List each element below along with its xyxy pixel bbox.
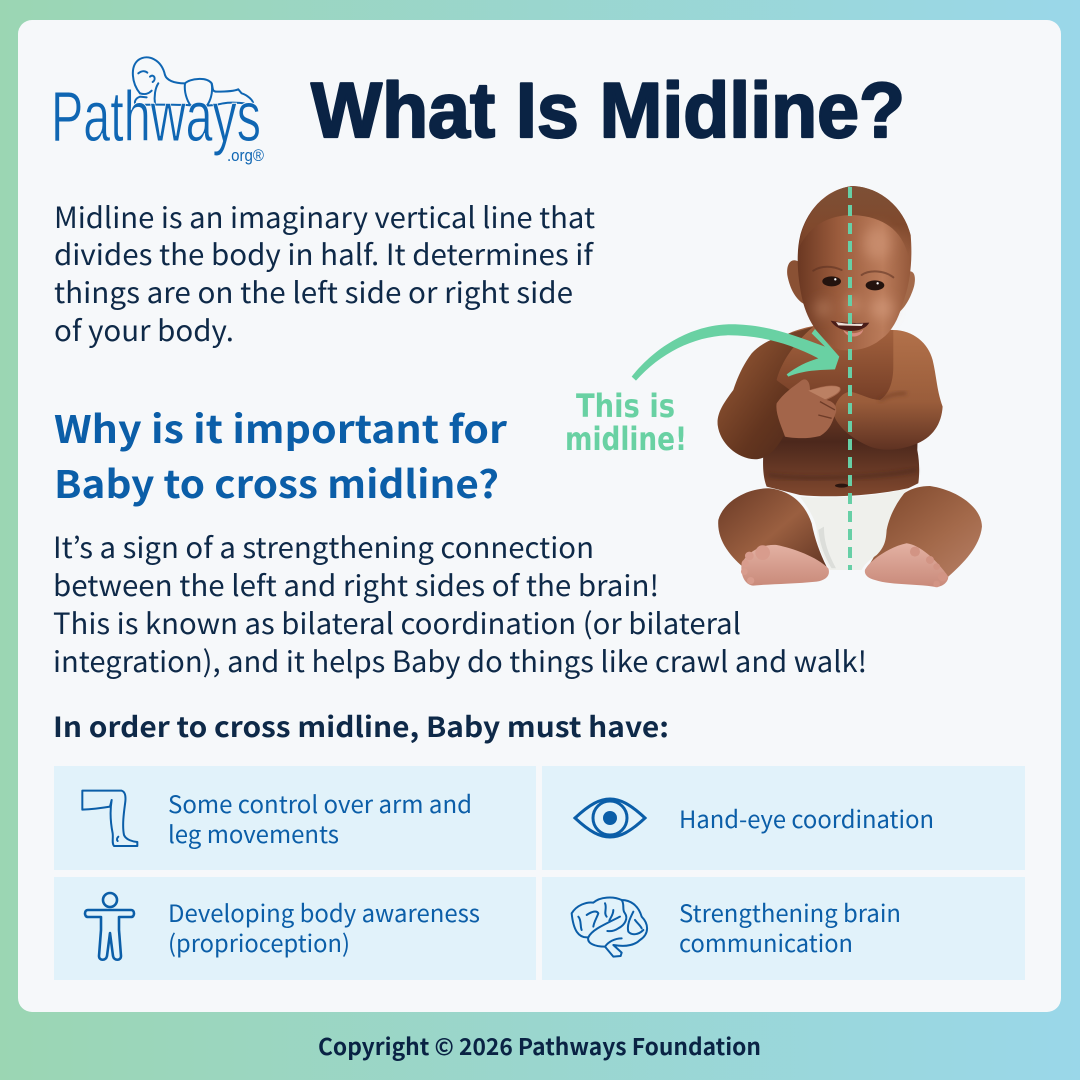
baby right leg	[865, 486, 982, 577]
baby diaper shading	[818, 527, 836, 568]
baby ears	[787, 260, 915, 314]
text: control: leg movements	[168, 815, 339, 850]
explanation text block: integration), and it helps Baby do things like crawl and walk!	[53, 639, 867, 681]
intro text block: things are on the left side or right side	[54, 270, 573, 312]
intro text block: Midline is an imaginary vertical line that	[54, 195, 595, 237]
baby belly crease and navel	[768, 470, 917, 488]
intro text block: of your body.	[54, 308, 234, 350]
panel: arm and leg movements	[54, 766, 536, 870]
baby left foot	[741, 545, 829, 586]
intro text block	[54, 195, 595, 350]
panel: body awareness	[54, 877, 536, 980]
intro text block: divides the body in half. It determines if	[54, 232, 595, 274]
logo baby outline	[133, 57, 253, 106]
baby right arm crease	[879, 393, 907, 401]
panel: hand-eye coordination	[542, 766, 1025, 870]
text: body awareness: (proprioception)	[168, 924, 350, 959]
subheading: Baby to cross midline?	[54, 454, 499, 509]
icon: leg	[82, 791, 137, 846]
baby left arm	[718, 327, 813, 459]
explanation text block	[53, 525, 867, 681]
panel: brain communication	[542, 877, 1025, 980]
footer copyright: Copyright © 2026 Pathways Foundation	[318, 1028, 761, 1062]
icon: person	[85, 893, 134, 960]
baby right foot	[865, 543, 948, 587]
baby diaper	[800, 488, 908, 570]
text: brain: communication	[679, 924, 853, 959]
arrow pointing to midline	[632, 324, 839, 381]
text: brain	[679, 894, 901, 959]
requirements heading: In order to cross midline, Baby must have:	[53, 706, 669, 746]
explanation text block: This is known as bilateral coordination (or bilateral	[53, 601, 741, 643]
title: What Is Midline?	[311, 66, 905, 154]
text: body awareness: Developing body awareness	[168, 894, 480, 929]
logo .org: .org®	[227, 146, 264, 165]
baby face highlights	[815, 227, 893, 319]
baby torso	[760, 326, 919, 496]
text: body awareness	[168, 894, 480, 959]
baby illustration	[718, 186, 982, 587]
baby head	[798, 186, 911, 350]
icon: eye	[575, 799, 645, 837]
logo: Pathways.org	[51, 57, 264, 165]
text: brain: Strengthening brain	[679, 894, 901, 929]
subheading: Why is it important for	[54, 399, 507, 454]
baby hand	[776, 379, 841, 438]
explanation text block: between the left and right sides of the brain!	[53, 563, 659, 605]
logo wordmark: Pathways	[51, 78, 261, 157]
subheading	[54, 399, 507, 509]
text: control: Some control over arm and	[168, 785, 472, 820]
callout: this is midline: This is	[576, 387, 675, 425]
midline dashed line	[848, 187, 852, 570]
explanation text block: It’s a sign of a strengthening connection	[53, 525, 594, 567]
baby face	[813, 267, 893, 337]
baby right arm	[833, 330, 943, 450]
baby left leg	[718, 488, 827, 580]
text: control	[168, 785, 472, 850]
callout: this is midline: midline!	[565, 420, 687, 458]
icon: brain	[572, 897, 647, 957]
callout: this is midline	[565, 387, 687, 458]
baby hair	[799, 186, 911, 257]
text: hand-eye: Hand-eye coordination	[679, 800, 934, 835]
